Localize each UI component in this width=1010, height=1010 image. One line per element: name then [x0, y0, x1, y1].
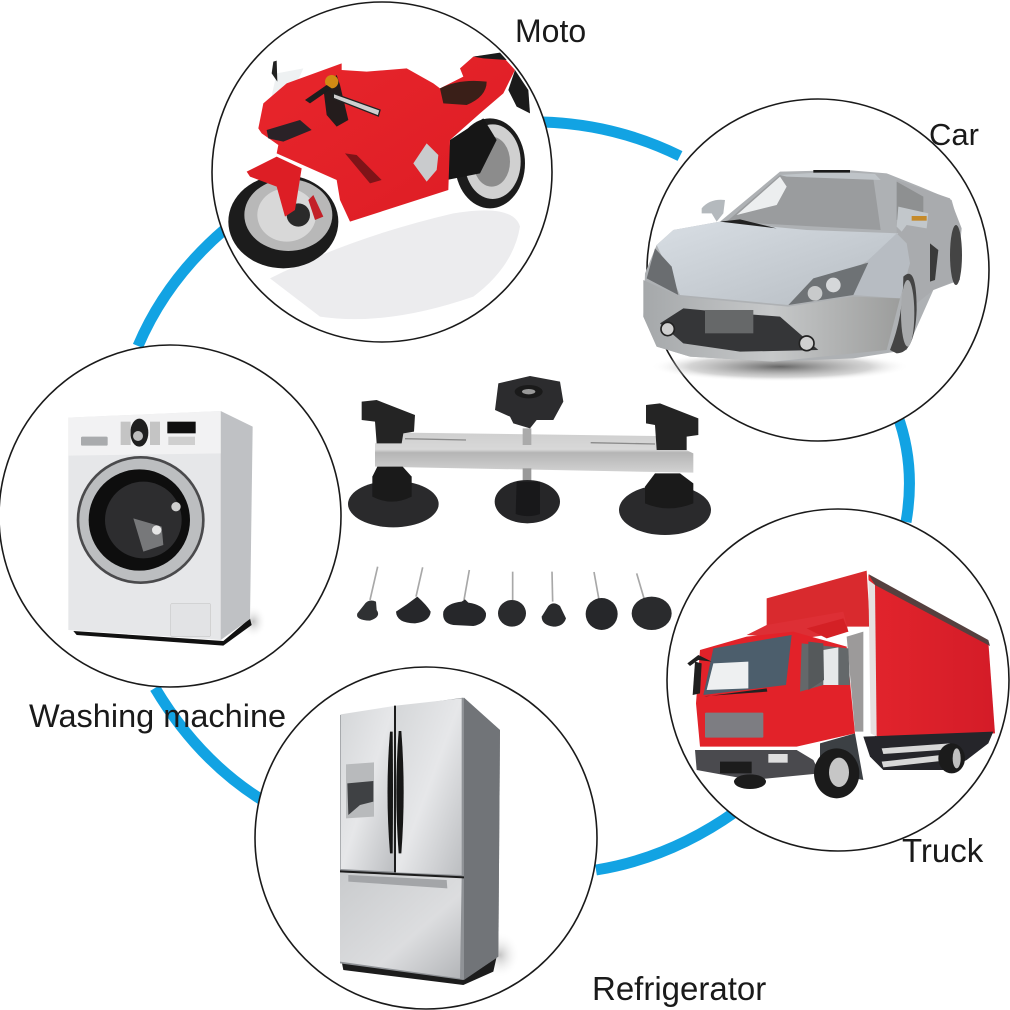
icon: washing machine	[68, 411, 267, 646]
centre base	[495, 480, 560, 523]
glue tabs	[357, 567, 672, 630]
blue connecting ring	[138, 122, 909, 870]
right base	[619, 485, 711, 535]
panel: car	[643, 99, 989, 441]
right knob	[646, 403, 698, 450]
icon: refrigerator	[340, 698, 520, 985]
panel: truck	[667, 509, 1009, 851]
left knob	[362, 400, 415, 443]
centre knob	[495, 376, 563, 428]
label: moto: Moto	[515, 13, 586, 49]
icon: truck	[687, 571, 995, 798]
icon: dent puller tool	[348, 376, 711, 630]
label: refrigerator: Refrigerator	[592, 970, 766, 1007]
panel: refrigerator	[255, 667, 597, 1009]
label: truck: Truck	[902, 832, 984, 869]
puller bar	[375, 433, 693, 473]
icon: motorcycle	[228, 53, 530, 319]
label: washing machine: Washing machine	[29, 698, 286, 734]
panel: moto	[212, 2, 552, 342]
icon: car	[643, 170, 962, 382]
label: car: Car	[929, 117, 979, 152]
panel: washing machine	[0, 345, 341, 687]
left base	[348, 481, 439, 527]
